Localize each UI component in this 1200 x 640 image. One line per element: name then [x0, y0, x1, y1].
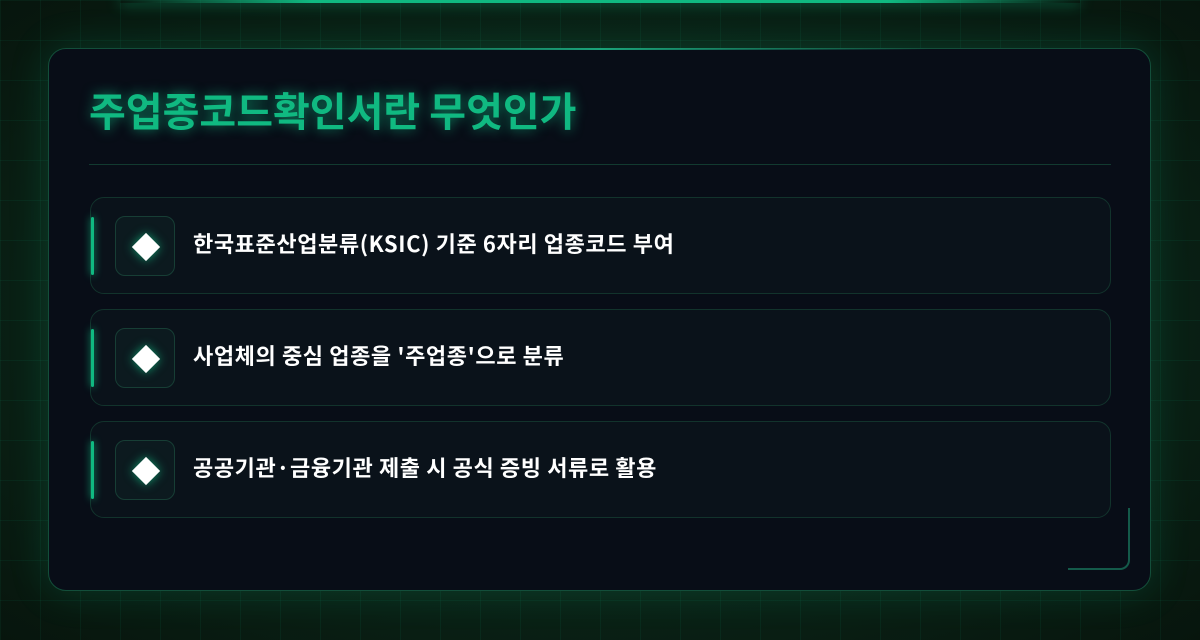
panel: main card	[48, 48, 1151, 591]
text: item 2: 사업체의 중심 업종을 '주업종'으로 분류	[193, 339, 564, 371]
icon: diamond	[115, 216, 175, 276]
title: 주업종코드확인서란 무엇인가	[89, 80, 576, 138]
icon: diamond	[115, 440, 175, 500]
item 2	[90, 309, 1111, 406]
corner accent	[1068, 508, 1130, 570]
text: item 1: 한국표준산업분류(KSIC) 기준 6자리 업종코드 부여	[193, 227, 674, 259]
icon: diamond	[115, 328, 175, 388]
item 1	[90, 197, 1111, 294]
item 3	[90, 421, 1111, 518]
text: item 3: 공공기관·금융기관 제출 시 공식 증빙 서류로 활용	[193, 451, 657, 483]
